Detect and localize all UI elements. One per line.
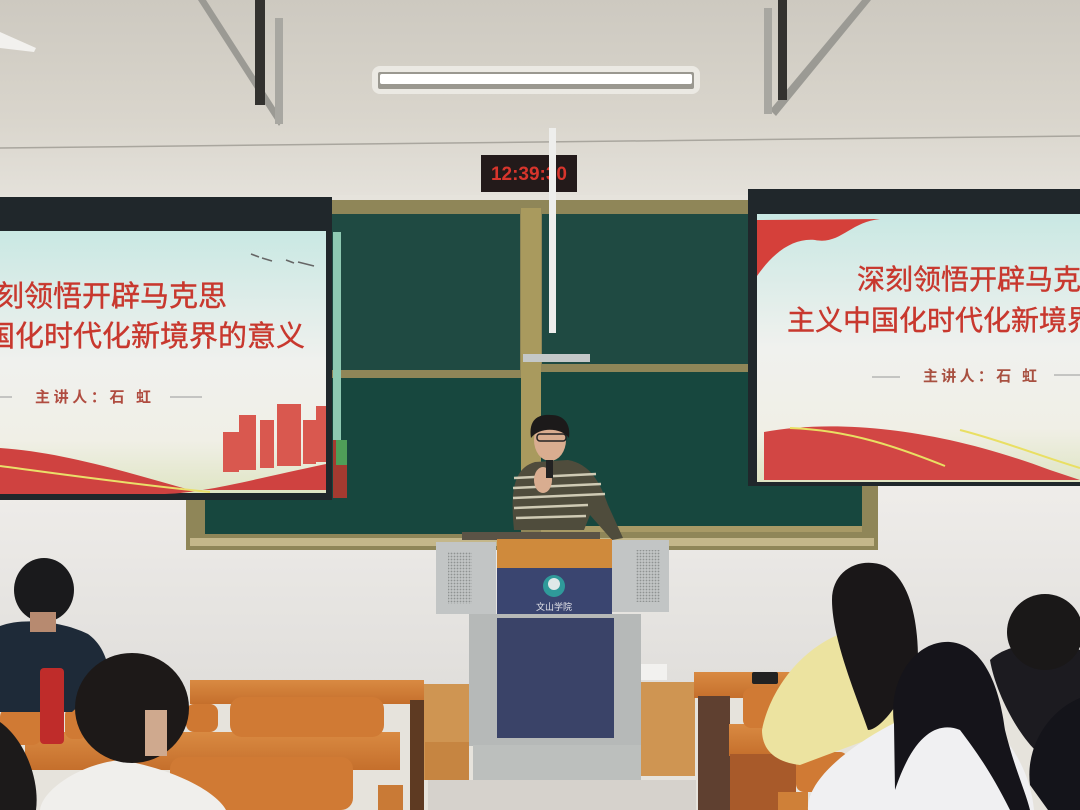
right student yellow jacket — [762, 563, 919, 765]
left student back — [0, 558, 110, 712]
lectern: 文山学院 — [536, 601, 572, 612]
red water bottle — [40, 668, 64, 744]
slide title: 刻领悟开辟马克思 — [0, 280, 227, 313]
right student white shirt — [808, 642, 1034, 810]
right projection screen: 主讲人：石 虹 — [923, 367, 1037, 385]
teacher platform and floor — [424, 664, 696, 810]
left projection screen: 主讲人：石 虹 — [35, 388, 151, 406]
front left student — [0, 653, 226, 810]
digital clock: 12:39:30 — [491, 164, 567, 185]
wave — [0, 448, 326, 494]
right desks — [694, 672, 848, 810]
lectern — [436, 532, 669, 802]
right projection screen — [748, 189, 1080, 486]
ceiling and upper wall — [0, 0, 1080, 195]
ceiling projector mounts — [0, 0, 871, 126]
birds — [251, 254, 314, 266]
speaker — [513, 415, 623, 540]
slide title: 深刻领悟开辟马克 — [857, 264, 1080, 295]
screen cord — [523, 128, 590, 362]
skyline — [223, 404, 326, 472]
lower wall — [0, 480, 1080, 690]
digital clock — [481, 155, 577, 192]
ceiling light — [372, 66, 700, 94]
left projection screen — [0, 197, 332, 500]
left desks and chairs — [0, 680, 424, 810]
blackboard — [186, 200, 878, 550]
far right students — [990, 594, 1080, 810]
